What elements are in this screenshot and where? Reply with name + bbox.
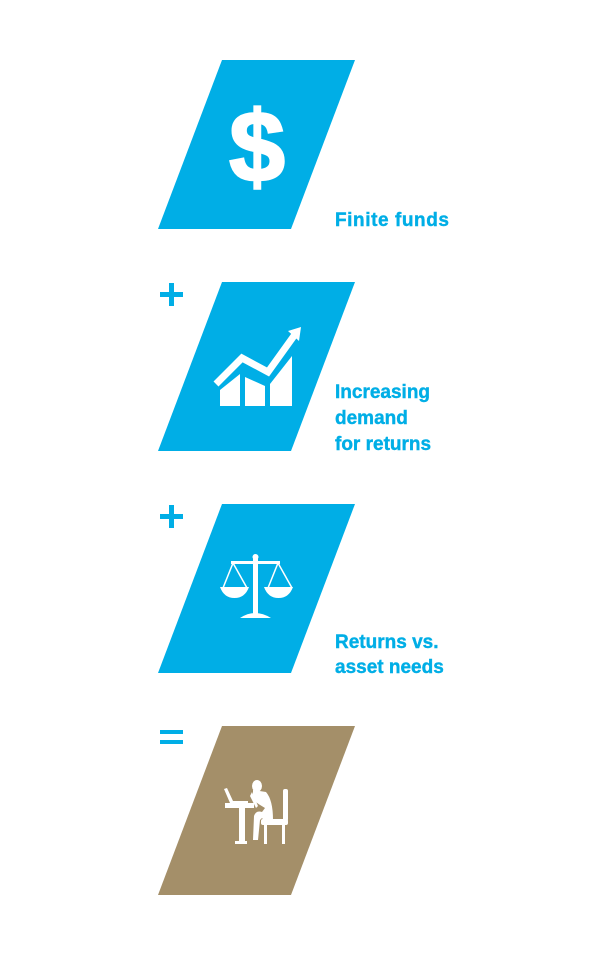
label: returns vs asset needs: [335, 632, 444, 678]
panel: increasing demand: [158, 282, 355, 451]
label: returns vs asset needs: Returns vs.: [335, 632, 438, 653]
icon: growth chart: [216, 327, 301, 406]
label: increasing demand: Increasing: [335, 382, 430, 403]
label: increasing demand: [335, 382, 431, 455]
icon: dollar sign: $: [229, 91, 285, 203]
icon: scales: [220, 554, 293, 618]
panel: finite funds: [158, 60, 355, 229]
operator: plus 2: [160, 505, 183, 528]
label: finite funds: Finite funds: [335, 210, 449, 231]
label: increasing demand: for returns: [335, 434, 431, 455]
operator: equals: [160, 730, 183, 744]
label: returns vs asset needs: asset needs: [335, 657, 444, 678]
label: increasing demand: demand: [335, 408, 408, 429]
icon: stressed person at desk: [224, 780, 288, 844]
panel: returns vs asset needs: [158, 504, 355, 673]
panel: result stress: [158, 726, 355, 895]
operator: plus 1: [160, 283, 183, 306]
